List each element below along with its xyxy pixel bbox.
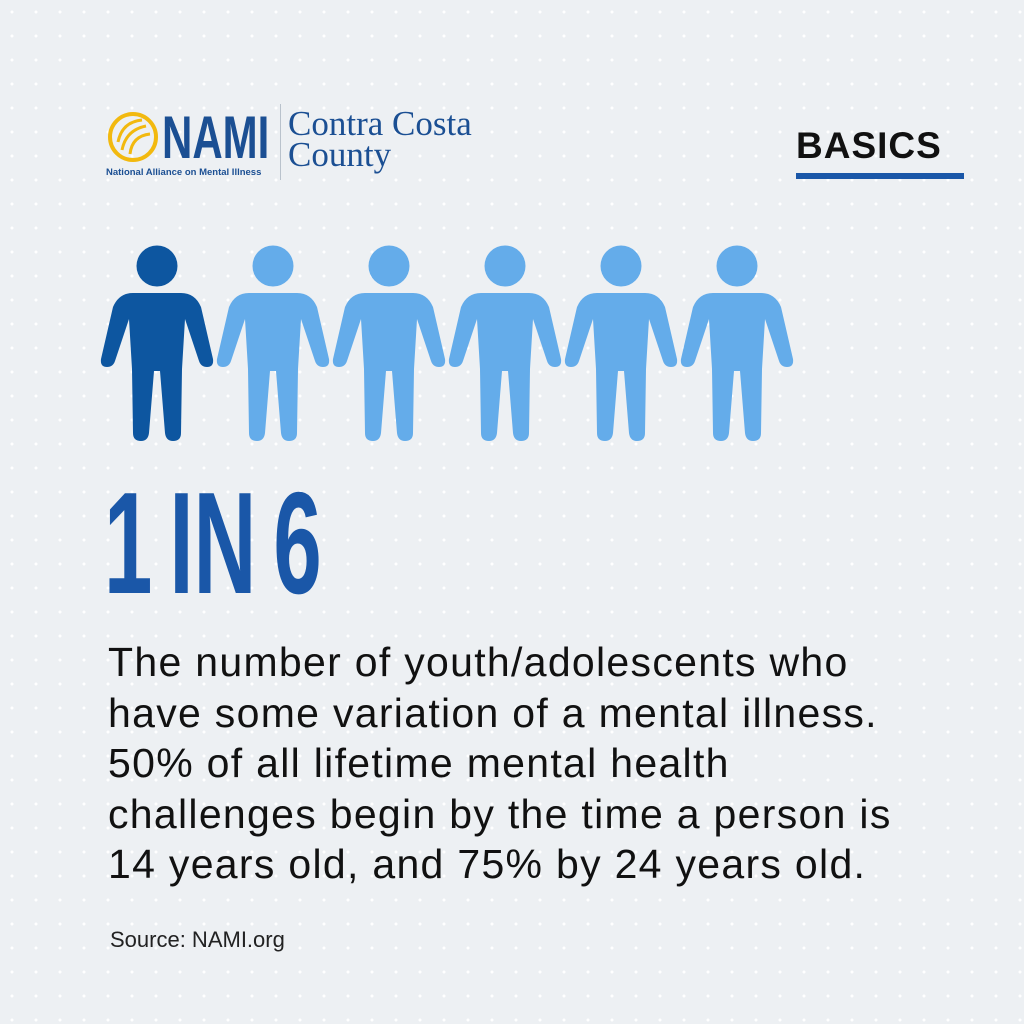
- logo: Contra Costa County: County: [288, 135, 391, 174]
- body text: [108, 639, 892, 887]
- body text: challenges begin by the time a person is: [108, 790, 892, 836]
- icon: NAMI yellow swirl: [108, 112, 158, 162]
- icon: person dark: [101, 246, 213, 441]
- icon: persons light: [217, 246, 793, 441]
- people icons: 1 dark of 6: [100, 246, 794, 441]
- logo: NAMI Contra Costa County: [106, 104, 472, 180]
- logo wordmark NAMI: NAMI: [162, 104, 269, 171]
- body text: 14 years old, and 75% by 24 years old.: [108, 841, 866, 887]
- logo: Contra Costa County: Contra Costa: [288, 104, 472, 143]
- statistic: 1 IN 6: 1 IN 6: [104, 462, 322, 624]
- logo: Contra Costa County: [288, 104, 472, 174]
- source: Source: NAMI.org: [110, 927, 285, 952]
- body text: The number of youth/adolescents who: [108, 639, 849, 685]
- body text: 50% of all lifetime mental health: [108, 740, 730, 786]
- heading: BASICS: BASICS: [796, 125, 942, 166]
- heading: BASICS: [796, 125, 964, 179]
- body text: have some variation of a mental illness.: [108, 690, 878, 736]
- logo subtitle: National Alliance on Mental Illness: [106, 167, 261, 178]
